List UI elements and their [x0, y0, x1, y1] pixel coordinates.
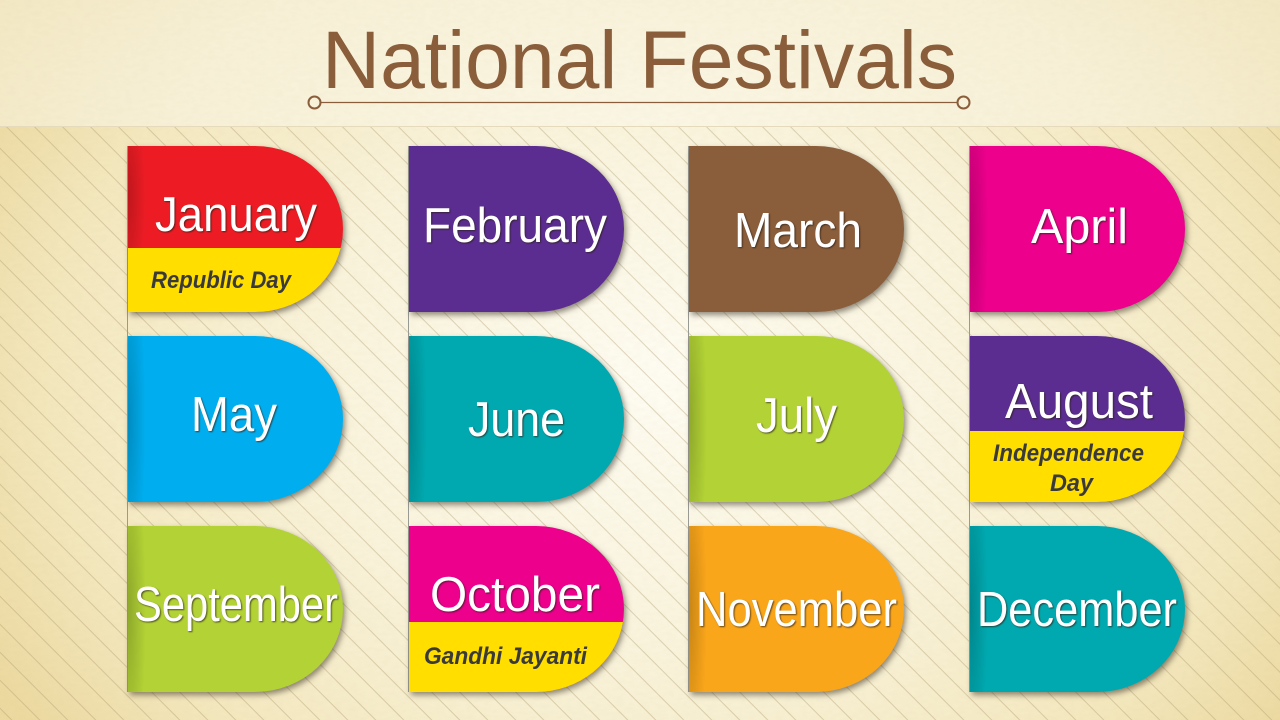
month label: May	[191, 388, 277, 442]
card: September	[128, 526, 343, 692]
festival label: Republic Day	[151, 267, 293, 294]
month label: August	[1005, 375, 1153, 429]
card: December	[970, 526, 1185, 692]
card: May	[128, 336, 343, 502]
header divider	[0, 126, 1280, 127]
month label: September	[134, 578, 338, 632]
card: November	[689, 526, 904, 692]
festival label	[993, 440, 1144, 497]
festival label: Independence	[993, 440, 1144, 467]
festival label: Day	[1050, 470, 1095, 497]
month label: February	[423, 199, 607, 253]
card: June	[409, 336, 624, 502]
month label: March	[734, 204, 862, 258]
header band	[0, 0, 1280, 127]
month label: November	[696, 583, 897, 637]
month label: April	[1031, 200, 1128, 254]
card: April	[970, 146, 1185, 312]
card: January	[128, 146, 343, 312]
card: October	[409, 526, 624, 692]
month label: January	[155, 188, 317, 242]
month label: December	[977, 583, 1177, 637]
month label: October	[430, 568, 600, 622]
card: February	[409, 146, 624, 312]
month label: July	[756, 389, 837, 443]
festival label: Gandhi Jayanti	[424, 643, 588, 670]
month label: June	[468, 393, 565, 447]
title: National Festivals	[322, 15, 957, 106]
column guide lines	[127, 146, 970, 692]
card: March	[689, 146, 904, 312]
title underline ornament	[308, 96, 970, 108]
card: August	[970, 336, 1185, 502]
card: July	[689, 336, 904, 502]
